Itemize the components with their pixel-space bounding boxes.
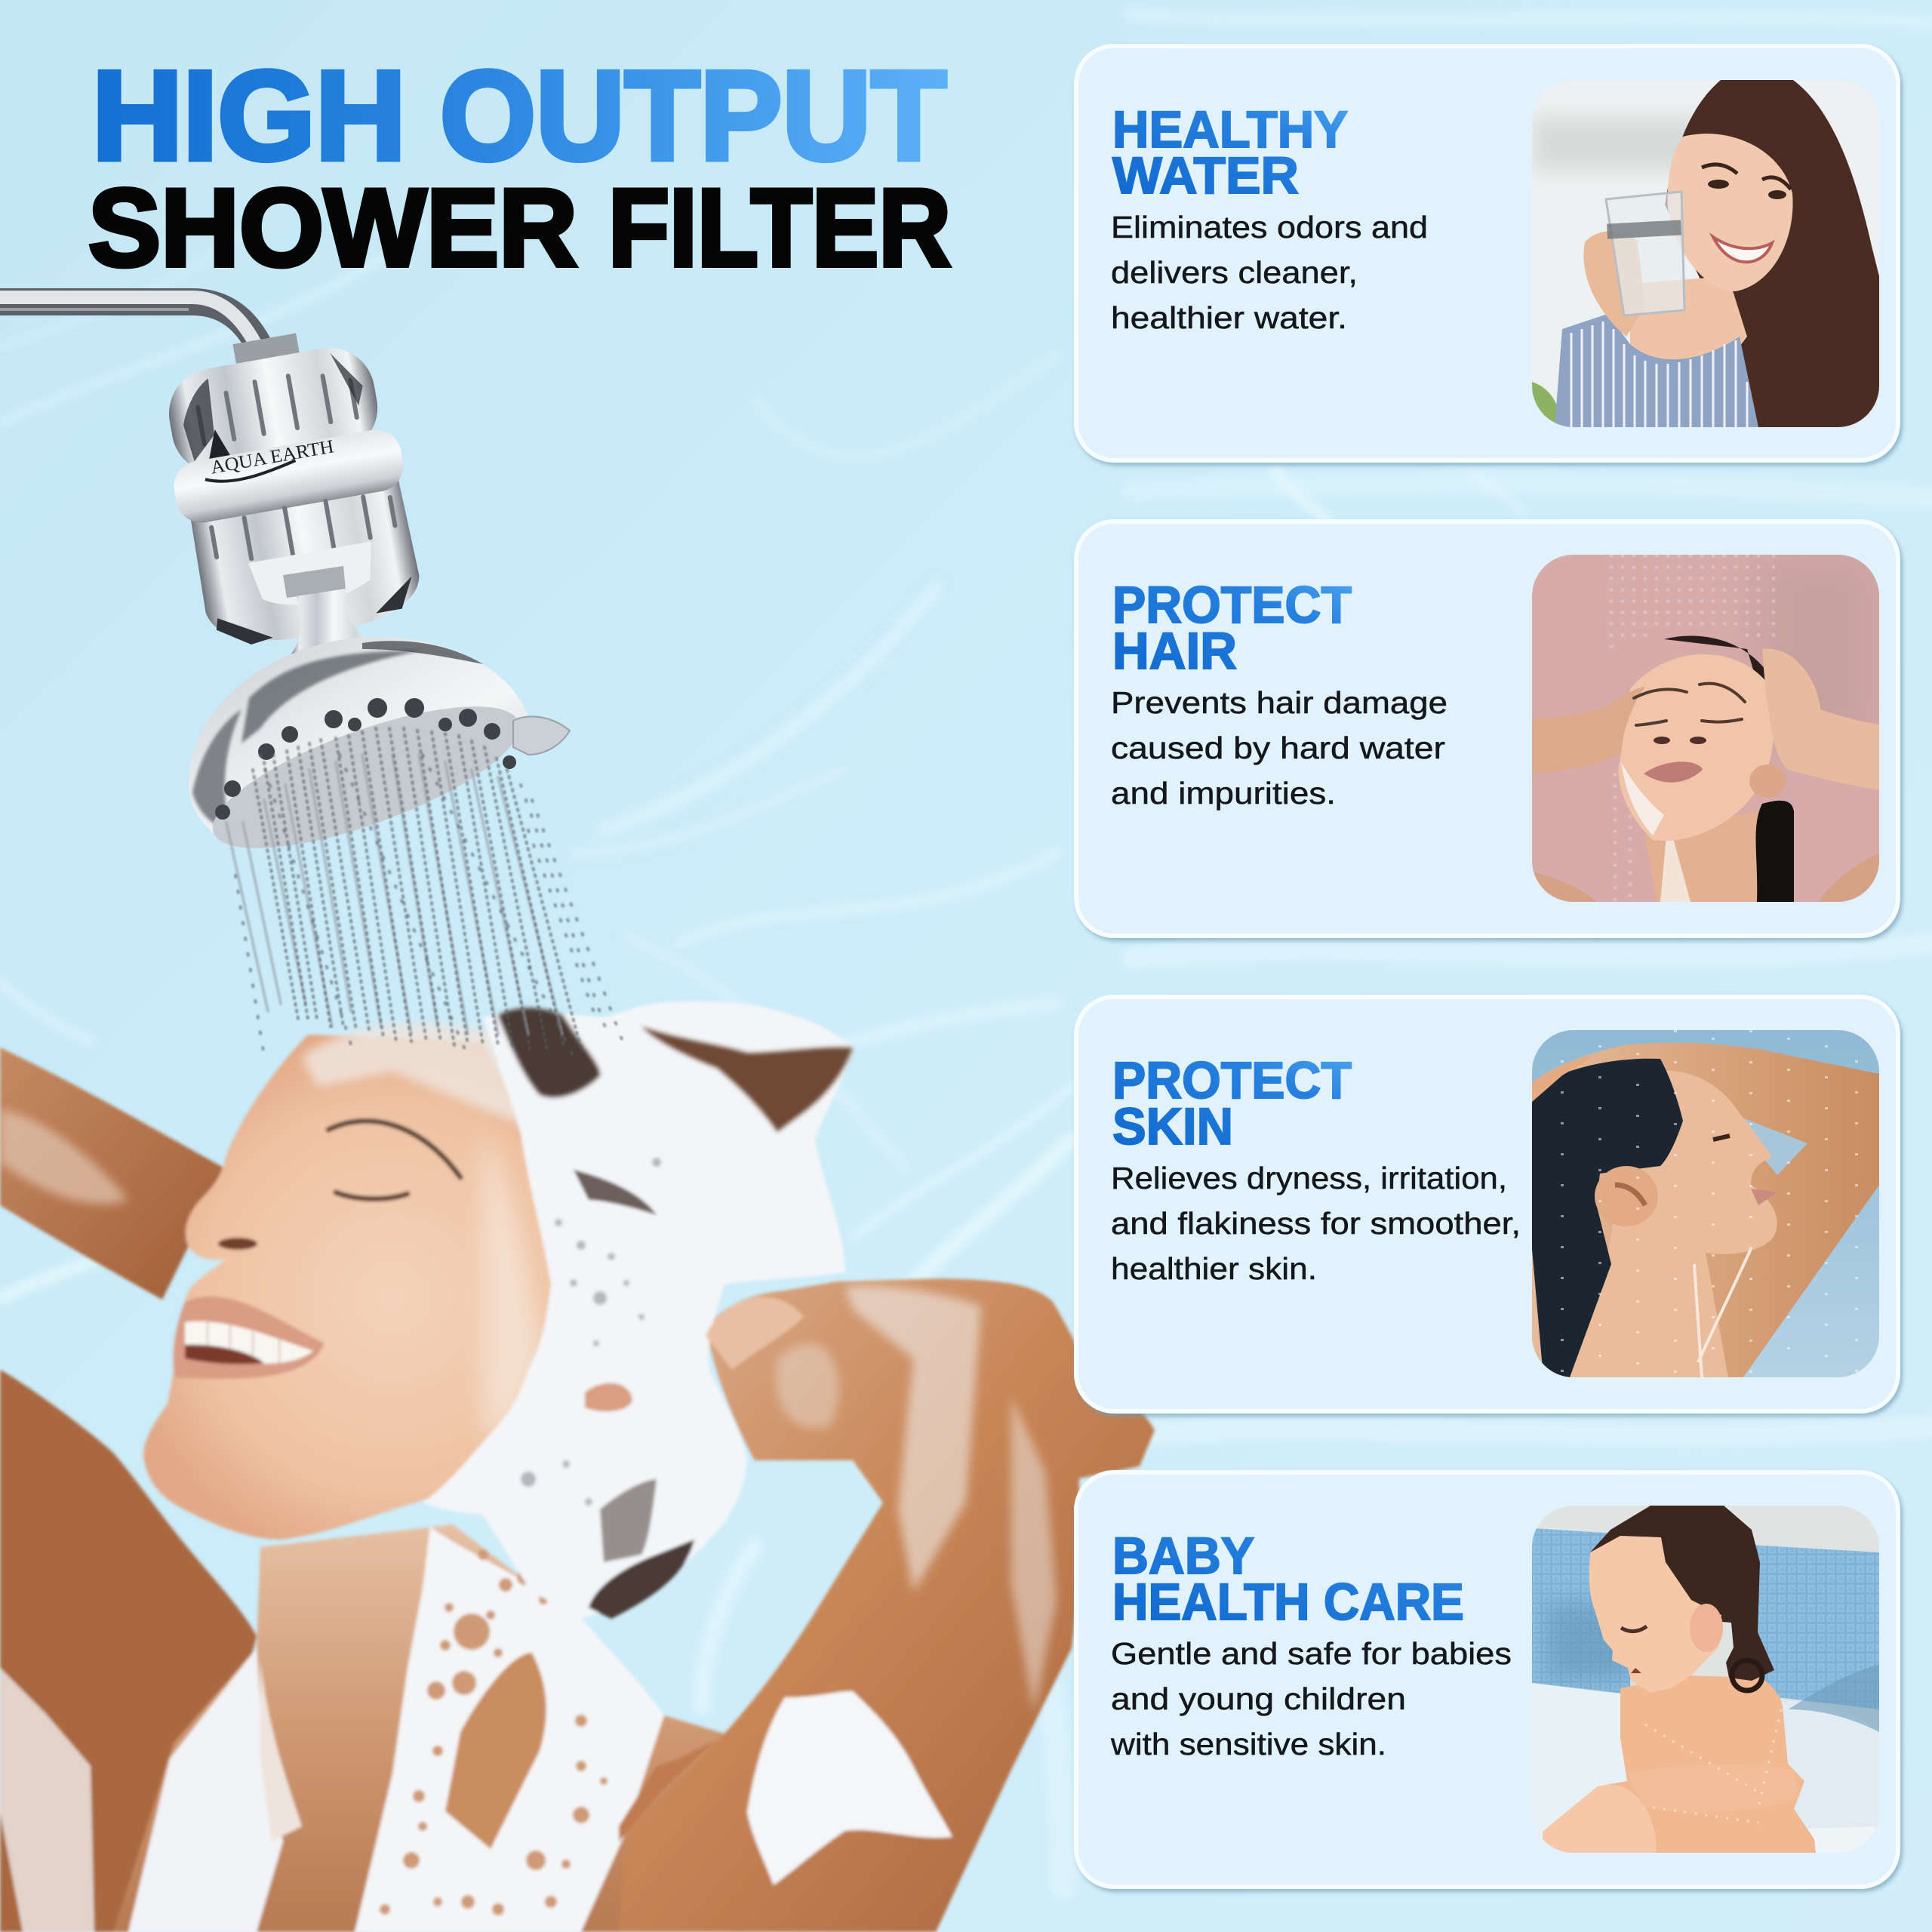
woman: smile [174, 1297, 325, 1379]
title line: HIGH OUTPUT: HIGH [92, 45, 406, 186]
woman: neck and chest [113, 1524, 724, 1932]
woman: near shoulder [0, 1370, 257, 1932]
woman: forehead foam [302, 1023, 543, 1132]
heading: HEALTH CARE [1112, 1573, 1464, 1631]
heading: WATER [1112, 146, 1299, 205]
woman: nostril [218, 1238, 257, 1250]
woman: foam bubbles [521, 1158, 661, 1506]
body text: and flakiness for smoother, [1111, 1206, 1521, 1241]
heading: HAIR [1112, 622, 1237, 680]
body text: with sensitive skin. [1110, 1727, 1386, 1761]
title line: SHOWER FILTER: FILTER [608, 166, 951, 289]
body text: healthier water. [1111, 300, 1347, 335]
heading: BABY [1112, 1527, 1254, 1585]
body text: Gentle and safe for babies [1111, 1636, 1512, 1671]
woman: foam on chest [0, 1520, 717, 1932]
panel: protect skin [1076, 997, 1898, 1411]
pipe [0, 297, 260, 349]
heading: PROTECT [1112, 576, 1352, 634]
toddler: body [1543, 1675, 1816, 1854]
filter body [151, 318, 430, 655]
heading: PROTECT [1112, 1051, 1352, 1109]
panel: baby health care [1076, 1472, 1898, 1887]
body text: healthier skin. [1111, 1251, 1317, 1286]
nozzles [215, 698, 516, 820]
body text: Relieves dryness, irritation, [1111, 1161, 1507, 1195]
panel: healthy water [1076, 46, 1898, 460]
shower head dome [189, 637, 528, 842]
woman: foam at temple [483, 1132, 543, 1435]
title line: SHOWER FILTER: SHOWER [88, 166, 577, 289]
woman: right arm [619, 1278, 1155, 1932]
swivel neck [283, 566, 377, 655]
photo: woman rinsing hair [1532, 555, 1879, 902]
body text: caused by hard water [1111, 731, 1445, 765]
woman: hand in foam [706, 1297, 804, 1370]
photo: woman drinking water [1532, 80, 1879, 427]
water spray [226, 728, 623, 1057]
woman: wet hair [498, 1008, 853, 1619]
filter ribs [195, 365, 357, 445]
brand logo: AQUA EARTH [209, 436, 335, 478]
woman: eyebrow and eye [328, 1121, 460, 1199]
nozzle plate [198, 678, 534, 877]
heading: SKIN [1112, 1097, 1233, 1155]
body text: and young children [1111, 1681, 1406, 1716]
body text: and impurities. [1111, 776, 1336, 811]
woman: far arm [0, 1048, 226, 1300]
photo: woman with wet skin [1532, 1030, 1879, 1377]
woman: foam in hair [423, 1001, 853, 1618]
title line: HIGH OUTPUT: OUTPUT [440, 45, 946, 186]
woman: ear [585, 1383, 632, 1411]
brand logo [197, 410, 337, 485]
body text: Prevents hair damage [1111, 685, 1447, 720]
product: shower filter and head [0, 297, 623, 1057]
woman: foam on arm [747, 1286, 1057, 1885]
heading: HEALTHY [1112, 100, 1348, 158]
photo: woman washing hair with foam [0, 1001, 1155, 1932]
title [88, 45, 951, 289]
body text: Eliminates odors and [1111, 210, 1428, 245]
woman: face [143, 1035, 604, 1540]
body text: delivers cleaner, [1111, 255, 1358, 290]
panel: protect hair [1076, 521, 1898, 936]
lever [513, 716, 570, 755]
photo: toddler in bath [1532, 1506, 1879, 1854]
